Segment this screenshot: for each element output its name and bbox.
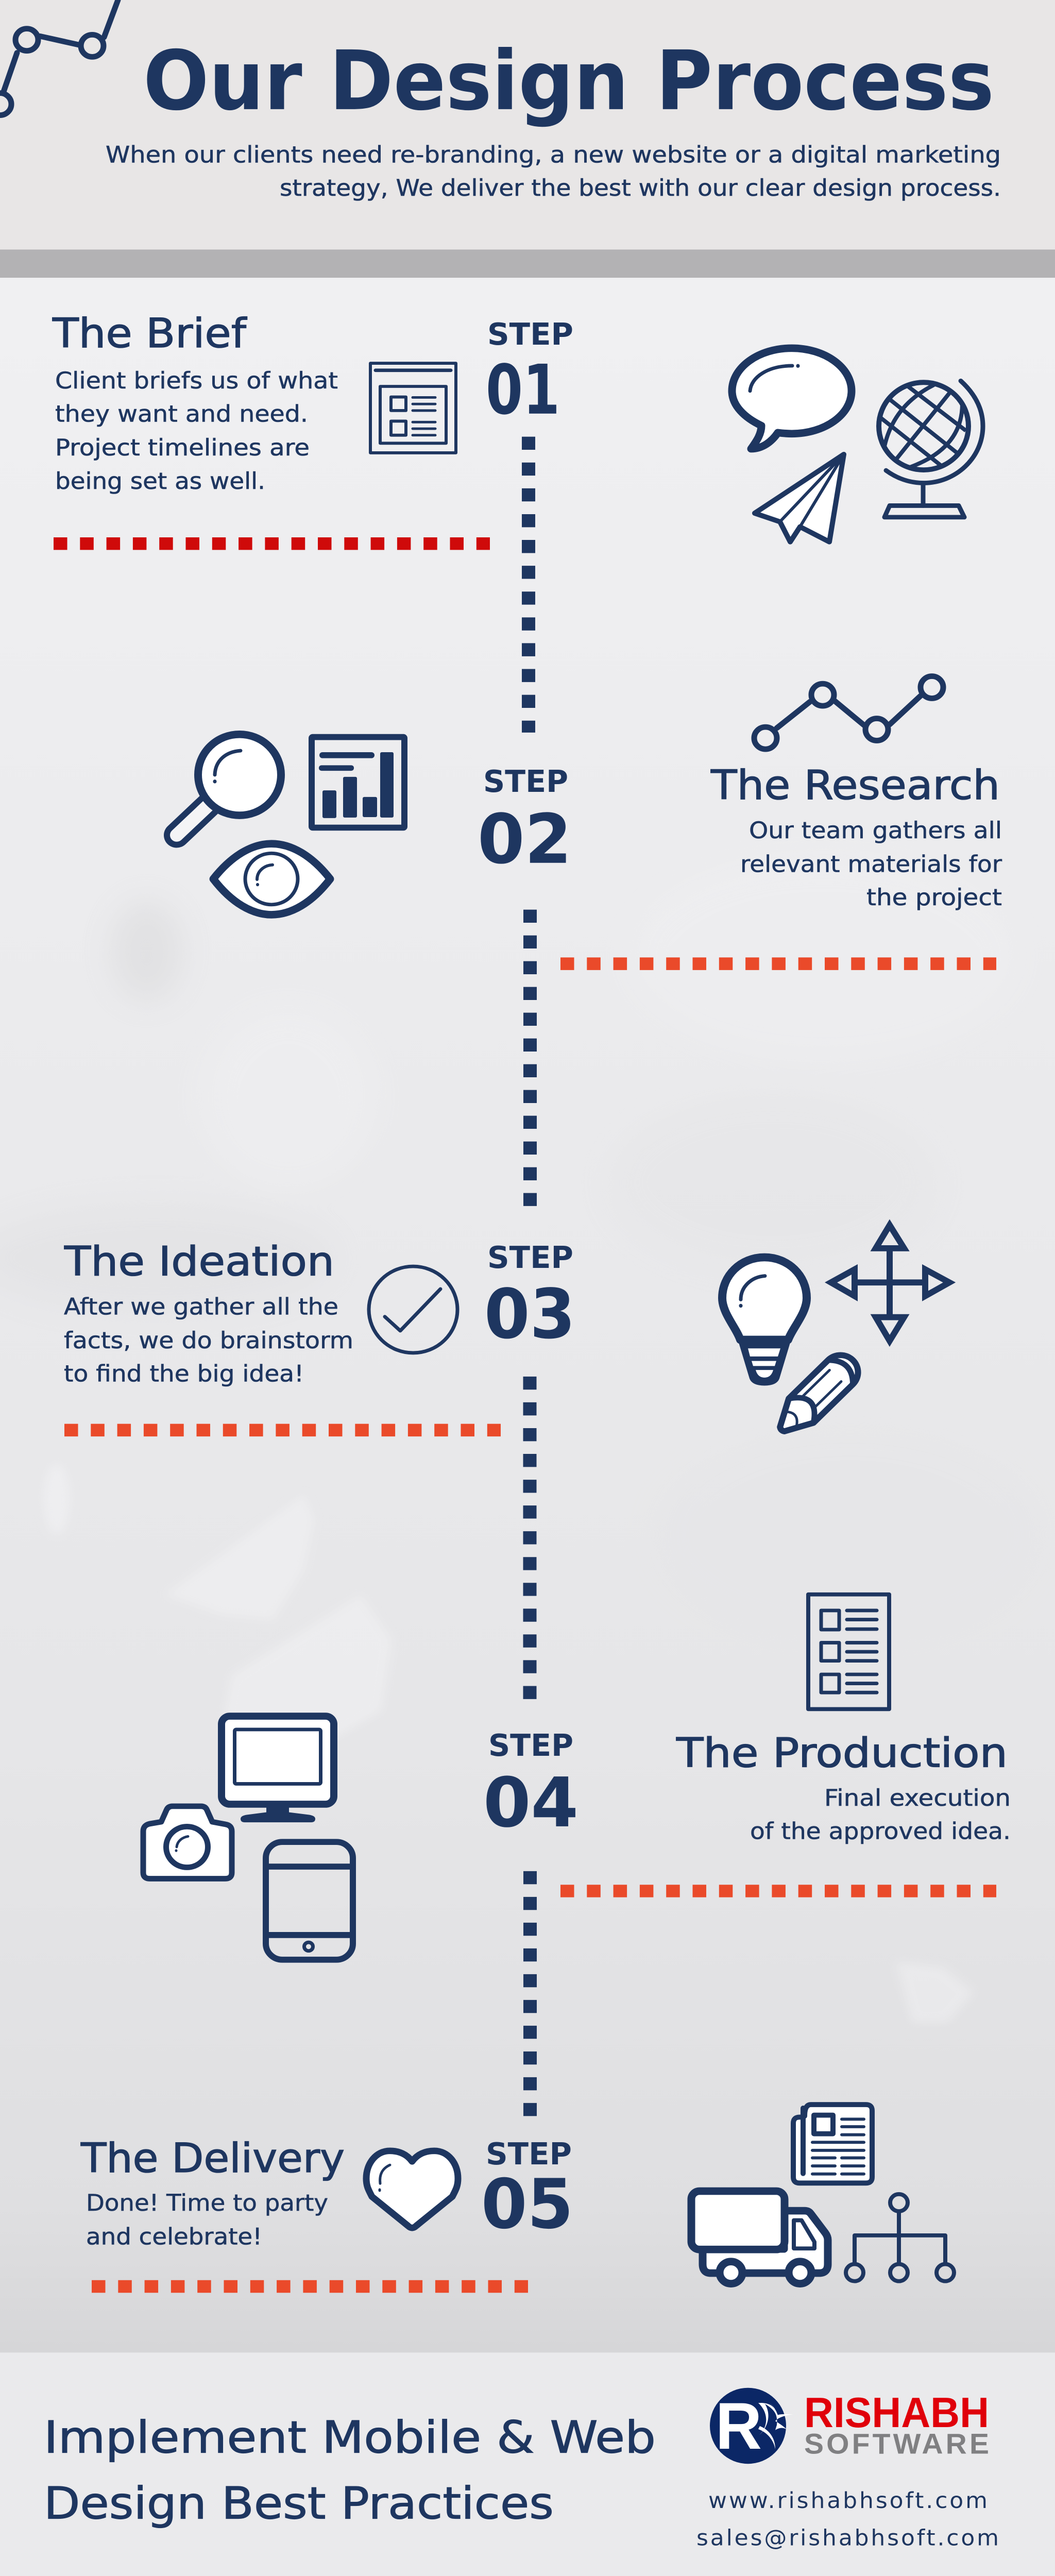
icon: header line graph xyxy=(0,0,118,115)
logo: rishabh software: R xyxy=(716,2389,762,2463)
intro text xyxy=(106,141,1001,201)
divider bar xyxy=(0,249,1055,278)
icon: four way arrows xyxy=(831,1225,949,1341)
icon: camera xyxy=(143,1806,232,1878)
icon: delivery truck xyxy=(691,2191,828,2284)
heading: the research: The Research xyxy=(710,762,1000,809)
icon: newspaper xyxy=(793,2105,872,2183)
step label 05: STEP xyxy=(486,2137,572,2172)
text: ideation description xyxy=(64,1293,353,1387)
icon: checklist document xyxy=(808,1595,889,1709)
text: research description: Our team gathers all xyxy=(749,817,1002,844)
panel: step 3 the ideation xyxy=(64,1225,949,1442)
text: brief description: Client briefs us of what xyxy=(55,367,338,394)
icon: globe xyxy=(877,381,983,517)
step label 01: STEP xyxy=(487,317,573,352)
step label 02: 02 xyxy=(478,799,572,879)
text: delivery description: Done! Time to party xyxy=(86,2190,328,2216)
dashed connector 2 xyxy=(523,910,537,1206)
text: research description: relevant materials for xyxy=(740,851,1002,877)
intro text: When our clients need re-branding, a new website or a digital marketing xyxy=(106,141,1001,168)
text: production description: Final execution xyxy=(824,1784,1011,1811)
heading: the production: The Production xyxy=(676,1730,1008,1776)
step label 05: 05 xyxy=(481,2164,573,2244)
text: research description: the project xyxy=(866,884,1002,911)
icon: check mark circle xyxy=(369,1266,457,1353)
contact details xyxy=(696,2488,999,2551)
title: Our Design Process xyxy=(143,33,994,128)
footer heading: Design Best Practices xyxy=(44,2478,554,2529)
logo: rishabh software xyxy=(710,2388,989,2464)
text: research description xyxy=(740,817,1002,911)
divider: red dashed line xyxy=(54,537,490,550)
icon: browser window xyxy=(370,363,456,453)
footer heading xyxy=(44,2412,656,2529)
icon: pencil xyxy=(769,1348,865,1442)
panel: step 4 the production xyxy=(143,1595,1011,1960)
divider: orange dashed line xyxy=(560,1885,996,1897)
step label 01: 01 xyxy=(486,350,560,430)
divider: orange dashed line xyxy=(92,2280,528,2293)
step label 04 xyxy=(483,1728,578,1843)
icon: monitor xyxy=(222,1716,334,1822)
step label 02 xyxy=(478,764,572,879)
panel: footer xyxy=(0,2352,1055,2576)
footer heading: Implement Mobile & Web xyxy=(44,2412,656,2463)
step label 02: STEP xyxy=(483,764,568,799)
step label 03: 03 xyxy=(484,1274,575,1354)
contact details: www.rishabhsoft.com xyxy=(708,2488,988,2514)
header band xyxy=(0,0,1055,278)
text: brief description xyxy=(55,367,338,495)
text: brief description: they want and need. xyxy=(55,400,308,427)
divider: orange dashed line xyxy=(560,957,996,970)
text: ideation description: After we gather all the xyxy=(64,1293,338,1320)
icon: bar chart report xyxy=(312,737,404,827)
heading: the brief: The Brief xyxy=(52,310,247,357)
text: production description: of the approved idea. xyxy=(750,1818,1011,1844)
logo: rishabh software: RISHABH xyxy=(804,2388,989,2436)
step label 04: 04 xyxy=(483,1762,578,1843)
panel: step 5 the delivery xyxy=(80,2105,954,2286)
panel: step 2 the research xyxy=(177,676,1002,964)
panel: step 1 the brief xyxy=(52,310,983,544)
text: ideation description: facts, we do brainstorm xyxy=(64,1327,353,1354)
icon: org chart xyxy=(846,2194,954,2281)
dashed connector 1 xyxy=(522,437,535,733)
icon: tablet xyxy=(266,1842,353,1960)
text: ideation description: to find the big idea! xyxy=(64,1360,304,1387)
heading: the delivery: The Delivery xyxy=(80,2135,345,2182)
icon: paper plane xyxy=(755,454,844,542)
heading: the ideation: The Ideation xyxy=(64,1238,334,1285)
divider: orange dashed line xyxy=(64,1423,501,1436)
contact details: sales@rishabhsoft.com xyxy=(696,2526,999,2551)
icon: speech bubble xyxy=(732,348,852,449)
dashed connector 4 xyxy=(523,1871,537,2116)
step label 03 xyxy=(484,1240,575,1354)
dashed connector 3 xyxy=(523,1377,537,1699)
icon: light bulb xyxy=(722,1257,807,1385)
logo: rishabh software: SOFTWARE xyxy=(804,2428,989,2460)
text: delivery description: and celebrate! xyxy=(86,2223,262,2250)
text: production description xyxy=(750,1784,1011,1844)
intro text: strategy, We deliver the best with our clear design process. xyxy=(280,174,1001,201)
icon: magnifier xyxy=(177,734,281,835)
text: brief description: Project timelines are xyxy=(55,434,310,461)
icon: heart xyxy=(366,2151,458,2228)
text: brief description: being set as well. xyxy=(55,468,265,495)
step label 03: STEP xyxy=(487,1240,573,1275)
text: delivery description xyxy=(86,2190,328,2250)
step label 01 xyxy=(486,317,573,430)
icon: eye xyxy=(213,844,330,914)
step label 04: STEP xyxy=(488,1728,573,1763)
icon: line graph xyxy=(754,676,943,749)
